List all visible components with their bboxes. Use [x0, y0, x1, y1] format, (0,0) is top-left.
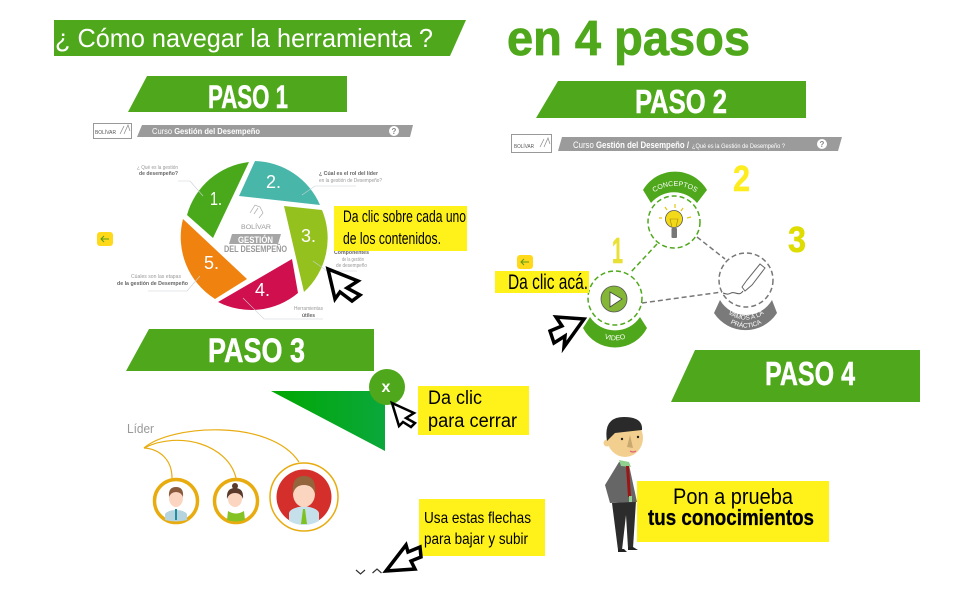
- pie labels with leader lines: útiles: [302, 313, 315, 319]
- banner: paso 3: PASO 3: [208, 332, 305, 370]
- node: vamos a la práctica: [714, 252, 777, 330]
- segment 1: 1.: [210, 189, 222, 209]
- pie labels with leader lines: Herramientas: [294, 306, 323, 312]
- icon: play button: [601, 286, 627, 312]
- center logo: gestión del desempeño: GESTIÓN: [238, 234, 273, 245]
- callout: da clic sobre cada uno: de los contenidos.: [343, 229, 441, 248]
- segment 2: [239, 161, 320, 205]
- callout: pon a prueba: [637, 481, 829, 542]
- panel: paso 1 screenshot header: ?: [392, 127, 396, 136]
- callout: da clic acá: [495, 271, 589, 294]
- pie labels with leader lines: [117, 165, 382, 319]
- avatar: woman: [214, 480, 258, 522]
- pie labels with leader lines: Cúales son las etapas: [131, 274, 182, 280]
- panel: paso 1 screenshot header: BOLÍVAR: [95, 129, 116, 136]
- number 3: 3: [788, 219, 806, 260]
- callout: da clic para cerrar: Da clic: [428, 388, 482, 409]
- character: man in suit: [604, 417, 643, 552]
- banner: paso 4: [671, 350, 920, 402]
- node: video: VIDEO: [606, 334, 625, 340]
- pie labels with leader lines: de la gestión de Desempeño: [117, 281, 188, 287]
- panel: paso 2 screenshot header: BOLÍVAR: [514, 143, 534, 150]
- pie labels with leader lines: de desempeño?: [139, 171, 178, 177]
- label: líder: Líder: [127, 421, 155, 436]
- pie labels with leader lines: en la gestión de Desempeño?: [319, 178, 382, 184]
- panel: paso 1 screenshot header: Curso Gestión del Desempeño: [152, 126, 260, 136]
- callout: da clic sobre cada uno: Da clic sobre cada uno: [343, 207, 466, 226]
- banner: paso 2: PASO 2: [635, 83, 727, 120]
- connector curves: [144, 430, 299, 478]
- icon: pen: [723, 264, 765, 294]
- node: vamos a la práctica: PRÁCTICA: [730, 320, 762, 328]
- center logo: gestión del desempeño: DEL DESEMPEÑO: [224, 244, 287, 254]
- pie labels with leader lines: ¿ Cúal es el rol del líder: [319, 171, 378, 177]
- panel: paso 1 screenshot header: [94, 124, 413, 138]
- node: video: [583, 270, 647, 348]
- back button: paso 2: [517, 255, 533, 269]
- number 1: 1: [612, 230, 623, 271]
- segment 5: [181, 219, 247, 299]
- callout: usa estas flechas: para bajar y subir: [424, 531, 529, 548]
- banner: paso 1: PASO 1: [208, 79, 288, 115]
- pie labels with leader lines: de desempeño: [336, 263, 367, 269]
- panel: paso 2 screenshot header: ?: [820, 140, 824, 149]
- callout: da clic para cerrar: para cerrar: [428, 411, 518, 432]
- green triangle: [271, 391, 385, 451]
- callout: usa estas flechas: Usa estas flechas: [424, 510, 531, 527]
- number 2: 2: [733, 158, 750, 199]
- back button: paso 1: [97, 232, 113, 246]
- banner: paso 1: [128, 76, 347, 115]
- diagram connectors: [630, 237, 725, 303]
- segment 3: [284, 206, 328, 292]
- callout: pon a prueba: Pon a prueba: [673, 484, 794, 509]
- node: conceptos: CONCEPTOS: [652, 181, 698, 192]
- node: vamos a la práctica: VAMOS A LA: [730, 310, 764, 320]
- center logo: gestión del desempeño: [224, 205, 287, 254]
- chart: pie menu with five contents: [181, 161, 328, 310]
- title banner: ¿ Cómo navegar la herramienta ?: [55, 23, 433, 53]
- cursor arrow: paso 2: [550, 317, 584, 347]
- segment 4: 4.: [255, 280, 270, 300]
- banner: paso 2: [536, 81, 806, 120]
- callout: da clic sobre cada uno: [334, 206, 467, 251]
- close button: [369, 369, 405, 405]
- close button: x: [382, 379, 390, 396]
- callout: usa estas flechas: [419, 499, 545, 556]
- pie labels with leader lines: ¿ Qué es la gestión: [137, 165, 178, 171]
- avatar: man: [154, 480, 198, 522]
- panel: paso 2 screenshot header: Curso Gestión del Desempeño /: [573, 140, 689, 151]
- pie labels with leader lines: de la gestión: [342, 257, 364, 263]
- segment 4: [218, 259, 298, 310]
- cursor arrow: paso 1: [328, 269, 360, 301]
- callout: da clic acá: Da clic acá.: [508, 271, 588, 294]
- icon: scroll chevrons: [356, 569, 382, 574]
- segment 2: 2.: [266, 172, 281, 192]
- pie labels with leader lines: Componentes: [334, 250, 369, 256]
- banner: paso 3: [126, 329, 374, 371]
- callout: pon a prueba: tus conocimientos: [648, 505, 814, 530]
- node: conceptos: [643, 172, 707, 249]
- cursor arrow: paso 3 scroll: [386, 545, 421, 571]
- avatar: leader: [270, 463, 338, 531]
- banner: paso 4: PASO 4: [765, 355, 855, 392]
- icon: light bulb: [659, 204, 691, 238]
- cursor arrow: paso 3: [392, 403, 415, 427]
- panel: paso 2 screenshot header: [512, 134, 842, 152]
- segment 3: 3.: [301, 226, 316, 246]
- center logo: gestión del desempeño: BOLÍVAR: [241, 224, 272, 231]
- segment 1: [187, 162, 249, 238]
- heading: en 4 pasos: en 4 pasos: [507, 12, 750, 66]
- panel: paso 2 screenshot header: ¿Qué es la Gestión de Desempeño ?: [692, 143, 785, 150]
- callout: da clic para cerrar: [418, 386, 529, 435]
- segment 5: 5.: [204, 253, 219, 273]
